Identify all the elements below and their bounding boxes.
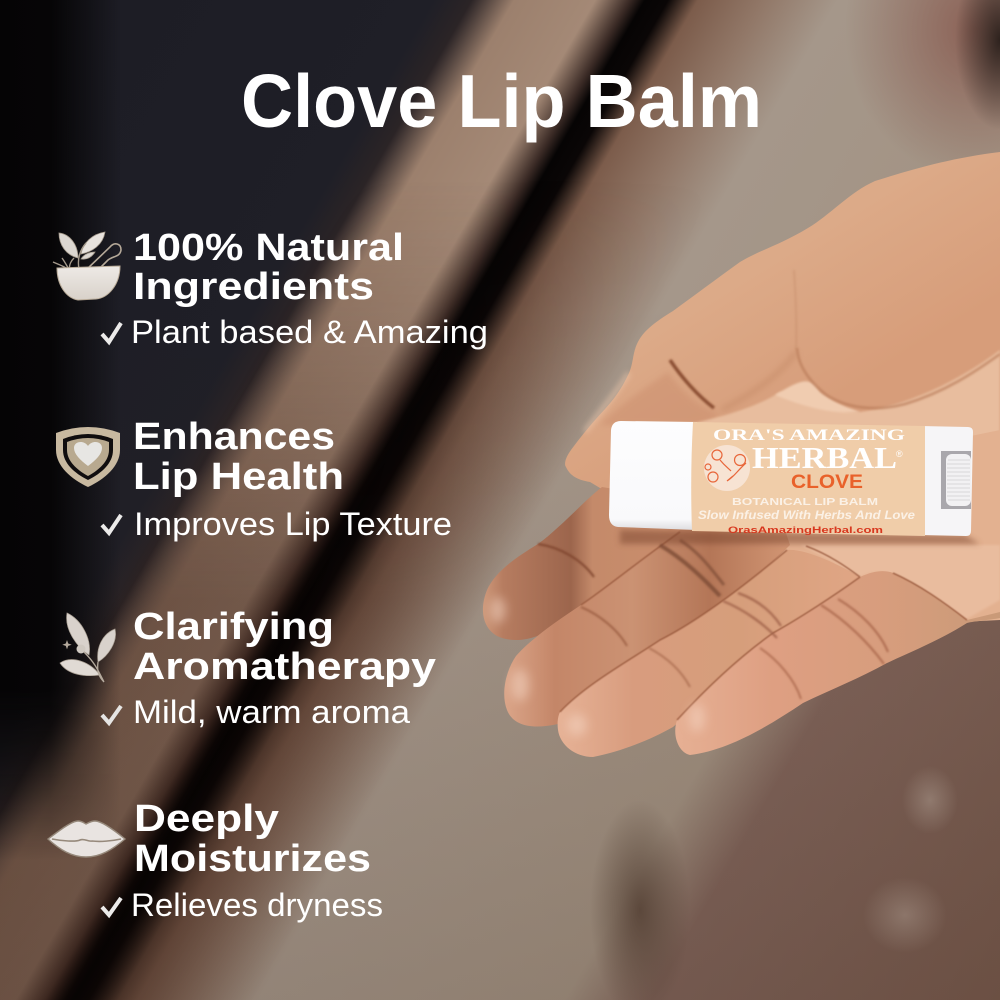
label xyxy=(691,422,925,536)
website: OrasAmazingHerbal.com xyxy=(728,525,883,536)
heading xyxy=(133,416,344,498)
benefit: Clarifying Aromatherapy xyxy=(60,606,436,730)
heading xyxy=(133,606,436,688)
product: lip balm tube xyxy=(609,421,973,536)
heading xyxy=(134,798,371,880)
finger: middle xyxy=(504,530,790,726)
benefit: Enhances Lip Health xyxy=(56,416,452,542)
subtext: Improves Lip Texture xyxy=(134,506,452,542)
heading: Lip Health xyxy=(133,456,344,498)
heading: 100% Natural xyxy=(133,227,404,269)
finger creases xyxy=(538,540,888,699)
heading xyxy=(133,227,404,308)
finger highlights xyxy=(490,597,705,736)
subtext: Relieves dryness xyxy=(131,887,383,923)
heading: Moisturizes xyxy=(134,838,371,880)
benefit: Deeply Moisturizes xyxy=(48,798,383,923)
icon: check xyxy=(102,898,121,915)
product type: BOTANICAL LIP BALM xyxy=(732,496,878,508)
finger: pinky xyxy=(675,571,1000,755)
icon: check xyxy=(102,323,121,342)
heading: Clarifying xyxy=(133,606,334,648)
heading: Enhances xyxy=(133,416,335,458)
icon: check xyxy=(102,515,121,533)
icon: mortar and pestle with herbs xyxy=(53,232,121,300)
tube end xyxy=(920,426,973,536)
wheel recess xyxy=(941,451,971,509)
hand: thumb heel crease xyxy=(797,348,1000,408)
finger separations xyxy=(560,532,967,720)
hand: bent finger shadow xyxy=(600,372,718,425)
finger: index xyxy=(483,487,700,640)
title: Clove Lip Balm xyxy=(241,59,762,143)
brand line: ORA'S AMAZING xyxy=(713,427,905,444)
twist wheel xyxy=(946,454,971,506)
tube cap xyxy=(609,421,697,530)
benefit: 100% Natural Ingredients xyxy=(53,227,488,350)
subtext: Plant based & Amazing xyxy=(131,314,488,350)
subtext: Mild, warm aroma xyxy=(133,694,410,730)
tagline: Slow Infused With Herbs And Love xyxy=(698,510,916,522)
icon: lips xyxy=(48,821,125,857)
icon: shield with heart xyxy=(56,427,120,487)
registered mark: ® xyxy=(896,449,903,459)
hand: palm lit area beneath thumb xyxy=(690,350,1000,440)
brand name: HERBAL xyxy=(752,440,897,475)
icon: check xyxy=(102,706,121,723)
clove illustration xyxy=(704,445,750,491)
heading: Deeply xyxy=(134,798,279,840)
finger: ring xyxy=(558,550,860,757)
heading: Ingredients xyxy=(133,266,374,308)
balm contact shadow xyxy=(620,530,980,544)
icon: leaf sprig xyxy=(60,613,116,682)
heading: Aromatherapy xyxy=(133,646,436,688)
photo: hand holding lip balm xyxy=(483,152,1000,757)
product name: CLOVE xyxy=(791,472,863,493)
hand: palm xyxy=(660,430,1000,640)
hand: back and thumb xyxy=(565,152,1000,500)
